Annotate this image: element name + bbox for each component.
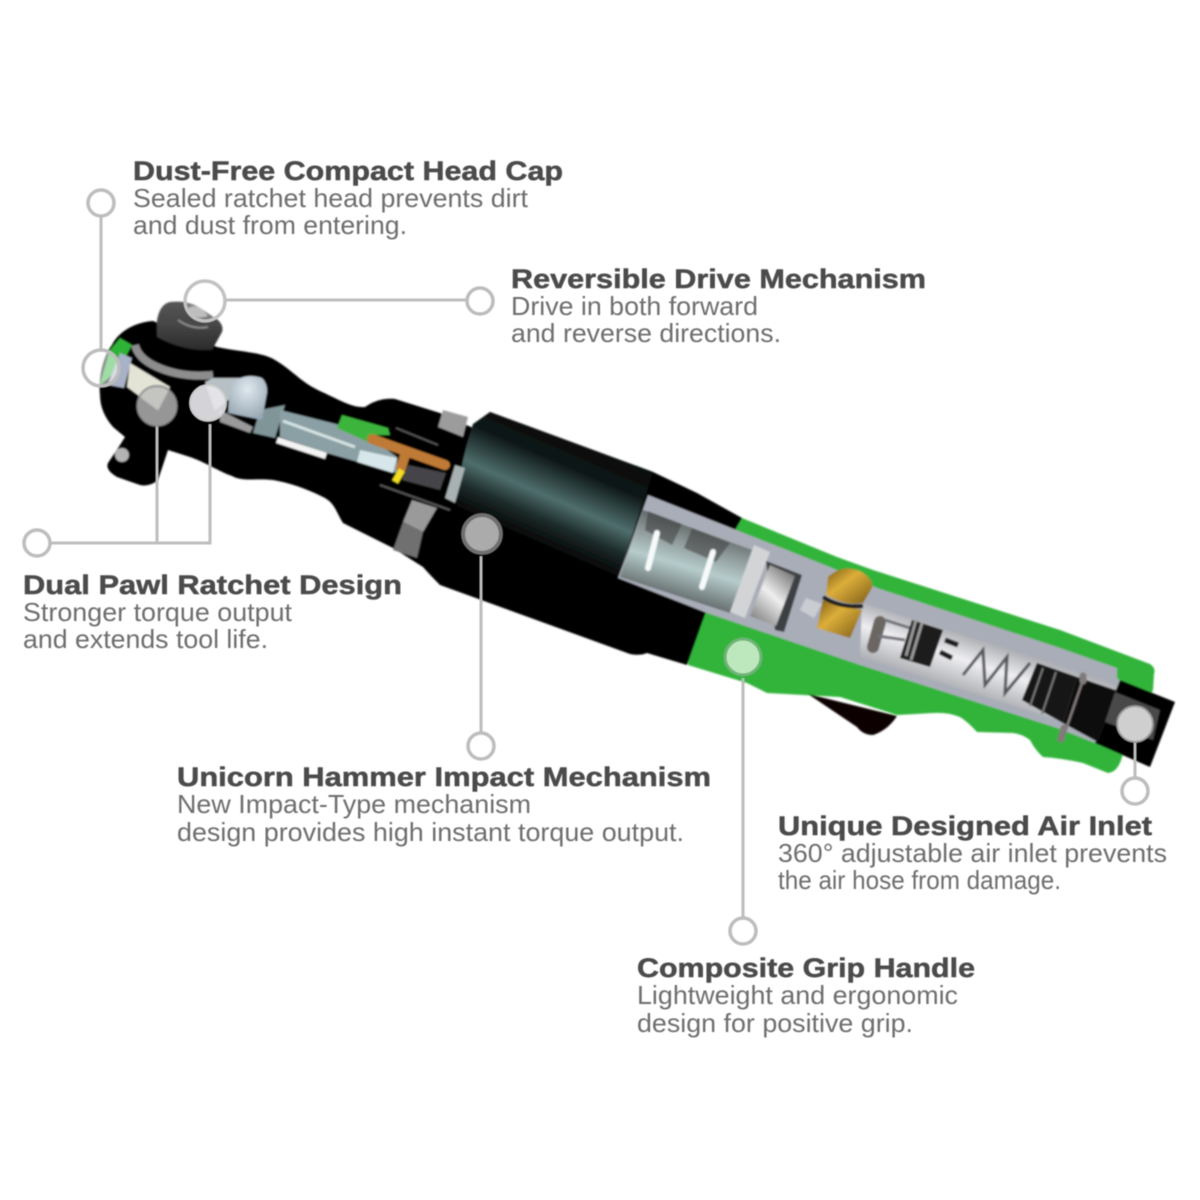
silver inner chamber [860, 603, 1117, 735]
shaft bar [878, 620, 910, 640]
marker on knob [185, 281, 225, 321]
marker ring end [1122, 778, 1148, 804]
body text: and extends tool life. [23, 624, 268, 654]
marker ring end [730, 918, 756, 944]
callout: dust-free head cap [83, 156, 563, 386]
clip ends [1061, 676, 1083, 739]
top hex nut [438, 410, 468, 437]
green grip housing [688, 500, 1154, 773]
green head accent [100, 338, 132, 385]
body text [23, 597, 293, 654]
blue-grey head cover [108, 353, 132, 388]
upper wall highlight [877, 588, 1117, 685]
callout: air inlet [778, 706, 1167, 895]
marker ring end [24, 530, 50, 556]
silver ratchet band [135, 345, 213, 376]
body text [637, 980, 958, 1038]
inlet grey plate [1105, 692, 1160, 740]
heading: Dust-Free Compact Head Cap [133, 156, 563, 186]
thin grey details [380, 428, 450, 510]
reversing knob cap [157, 302, 222, 350]
nut plate and ball nut [205, 376, 285, 438]
callout: reversible drive [185, 264, 926, 348]
marker ring end [468, 733, 494, 759]
marker ring top [88, 190, 114, 216]
teal motor barrel [455, 412, 653, 600]
lower hex nut [393, 500, 437, 558]
body text: New Impact-Type mechanism [177, 789, 531, 819]
marker on grip [725, 639, 761, 675]
callout: dual pawl [23, 385, 402, 654]
body text: and dust from entering. [133, 210, 407, 240]
marker ring end [467, 288, 493, 314]
leader line [480, 556, 482, 733]
callout: hammer impact [177, 515, 711, 847]
leader lines [50, 424, 210, 543]
leader line [1134, 742, 1136, 778]
bearing [766, 561, 802, 632]
dark gear [900, 620, 958, 667]
marker circle on head [83, 350, 119, 386]
body text: Lightweight and ergonomic [637, 980, 958, 1010]
orange rod [372, 439, 445, 468]
body text [177, 789, 684, 847]
motor cylinder with slots [620, 510, 752, 613]
black trigger lever [808, 694, 897, 735]
brass valve [817, 568, 872, 638]
cream pawl [127, 363, 170, 410]
heading: Unique Designed Air Inlet [778, 811, 1152, 841]
dark block [402, 465, 446, 490]
grey valve pin [873, 622, 880, 647]
inlet clip [1064, 680, 1083, 735]
marker pawl two [190, 385, 226, 421]
body text: the air hose from damage. [778, 865, 1061, 895]
square drive pin [115, 448, 129, 462]
body text [778, 838, 1167, 895]
heading: Dual Pawl Ratchet Design [23, 570, 402, 600]
marker on barrel [463, 515, 501, 553]
body text [511, 291, 781, 348]
heading: Reversible Drive Mechanism [511, 264, 926, 294]
body text: design provides high instant torque output. [177, 817, 684, 847]
callout: grip handle [637, 639, 975, 1038]
motor collar [730, 545, 770, 618]
dark inlet fitting [1063, 677, 1118, 742]
body text: Sealed ratchet head prevents dirt [133, 183, 529, 213]
marker on inlet [1117, 706, 1153, 742]
black air inlet end [1095, 680, 1175, 767]
leader line [100, 216, 102, 352]
body text: 360° adjustable air inlet prevents [778, 838, 1167, 868]
wrench illustration [100, 302, 1175, 773]
heading: Composite Grip Handle [637, 953, 975, 983]
body text [133, 183, 529, 240]
leader line [742, 678, 744, 917]
green inner piece [337, 415, 390, 442]
leader line [224, 298, 466, 302]
body text: Stronger torque output [23, 597, 293, 627]
body text: and reverse directions. [511, 318, 781, 348]
black ratchet head and neck [100, 321, 742, 665]
black seal rings [1022, 663, 1077, 723]
body text: design for positive grip. [637, 1008, 913, 1038]
steel ring [445, 465, 465, 503]
yellow clip [395, 470, 402, 482]
heading: Unicorn Hammer Impact Mechanism [177, 762, 711, 792]
marker pawl one [137, 386, 177, 426]
body text: Drive in both forward [511, 291, 758, 321]
small silver nub [800, 598, 822, 618]
drive shaft [276, 410, 397, 473]
spring [963, 650, 1030, 693]
grey cutaway wall [618, 495, 1120, 743]
